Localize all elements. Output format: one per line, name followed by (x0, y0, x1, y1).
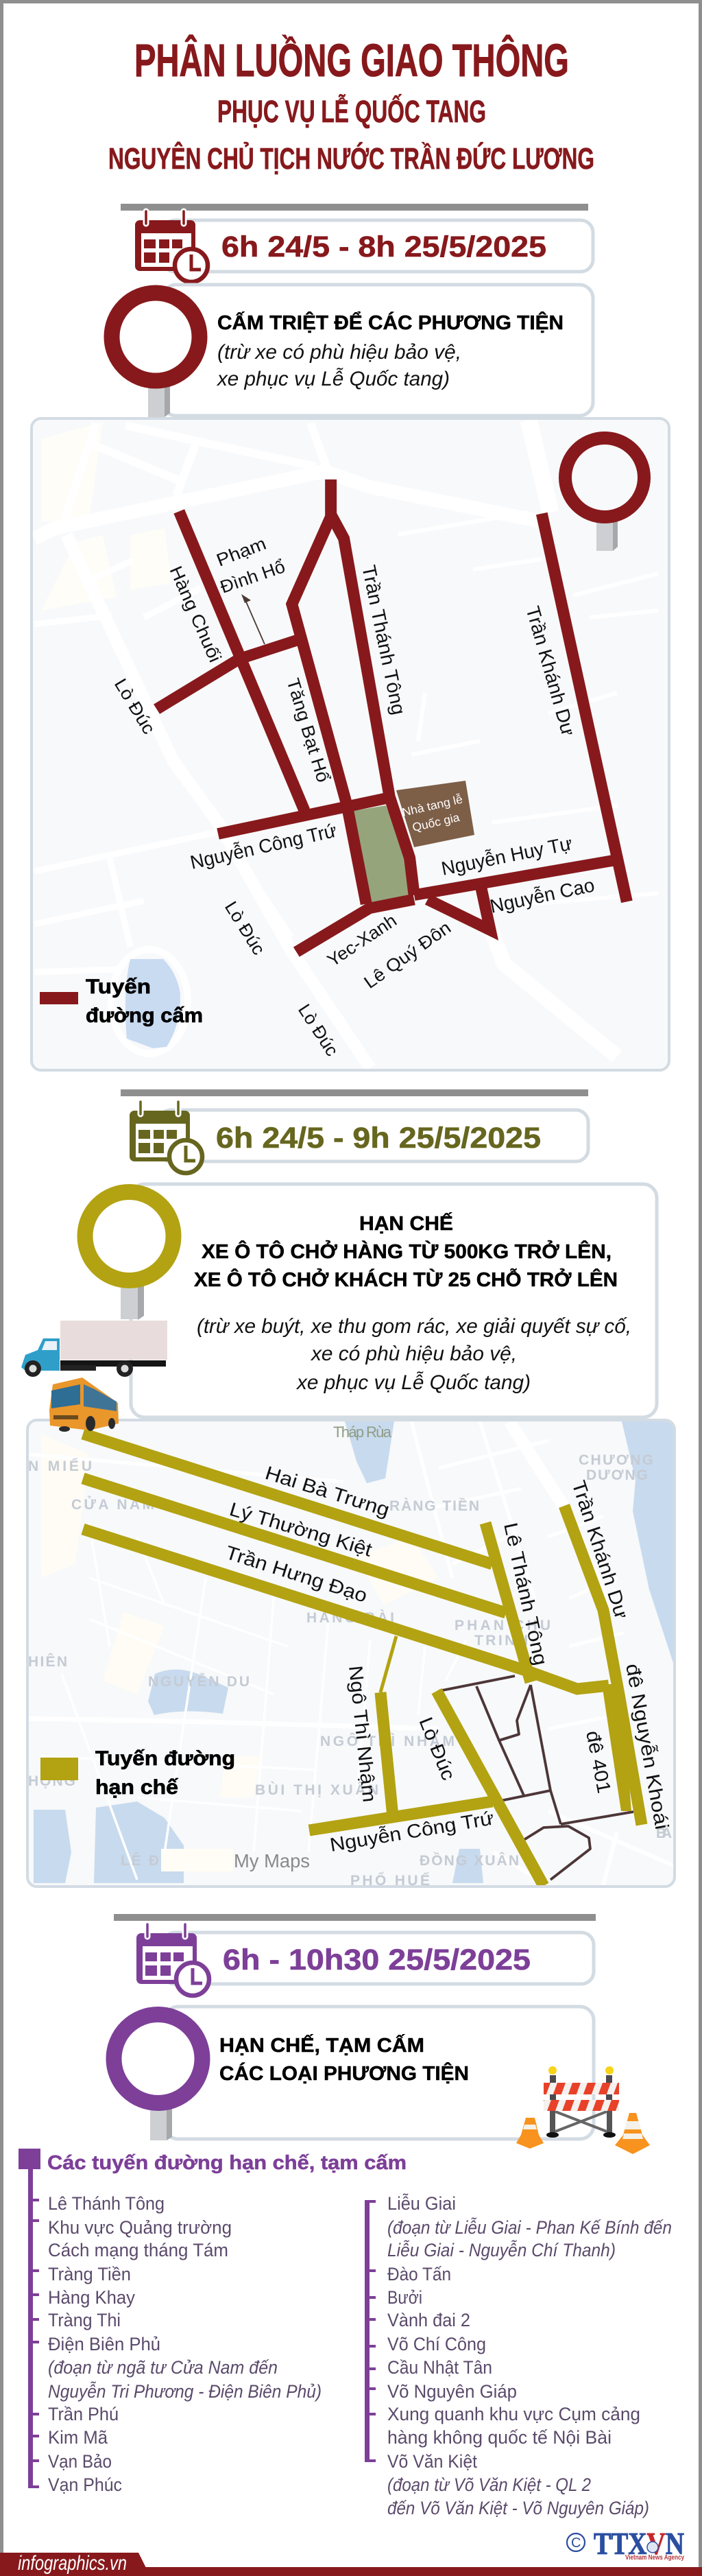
logo: TTXVN copyright: TTXVN (594, 2527, 684, 2561)
faded place names: NGUYỄN DU (148, 1674, 250, 1690)
panel: restricted vehicles box (131, 1184, 657, 1417)
street labels map 2: Trần Khánh Dư (568, 1478, 633, 1622)
panel: restricted vehicles box: XE Ô TÔ CHỞ KHÁCH TỪ 25 CHỖ TRỞ LÊN (194, 1268, 618, 1291)
faded place names: My Maps (234, 1850, 310, 1871)
icon: calendar and clock olive (130, 1102, 202, 1173)
date box 3: 6h - 10h30 25/5/2025 (223, 1943, 531, 1976)
list: left column: Nguyễn Tri Phương - Điện Biên Phủ) (48, 2380, 322, 2402)
street labels map 2 (223, 1462, 673, 1856)
faded place names: DƯƠNG (586, 1467, 648, 1483)
panel: total ban box (162, 285, 593, 416)
icon: olive road sign (85, 1192, 173, 1320)
list: left column: Hàng Khay (48, 2287, 135, 2308)
street labels map 2: Nguyễn Công Trứ (328, 1807, 496, 1856)
list: left column: Tràng Thi (48, 2310, 121, 2330)
street labels map 1: Lò Đúc (110, 675, 160, 737)
faded place names: N MIẾU (28, 1458, 92, 1474)
faded place names: ĐỒNG XUÂN (420, 1852, 519, 1869)
list: right column: Bưởi (387, 2287, 422, 2308)
panel: total ban box: (trừ xe có phù hiệu bảo vệ, (217, 341, 461, 364)
national funeral hall (396, 781, 474, 847)
list: left column: Kim Mã (48, 2427, 108, 2448)
date box 2: 6h 24/5 - 9h 25/5/2025 (216, 1122, 541, 1155)
date box 1 (162, 220, 593, 272)
list: right column: Đào Tấn (387, 2264, 451, 2284)
faded place names: RÀNG TIỀN (389, 1498, 479, 1514)
faded place names: LÊ Đ (121, 1852, 159, 1869)
street labels map 1: Nguyễn Cao (488, 874, 596, 917)
list: left column: Lê Thánh Tông (48, 2193, 165, 2214)
street labels map 1: Lò Đúc (221, 897, 269, 958)
faded place names (28, 1423, 672, 1889)
street labels map 1: Phạm (213, 533, 269, 571)
icon: small red road sign (565, 438, 644, 551)
divider bar 2 (121, 1089, 588, 1096)
faded place names: BÀ (656, 1825, 672, 1841)
faded place names: HÀNG BÀI (306, 1610, 394, 1626)
list: right column: Võ Văn Kiệt (387, 2451, 477, 2472)
list: right column: Võ Nguyên Giáp (387, 2381, 517, 2402)
icon: bus (49, 1378, 119, 1432)
legend: restricted route: Tuyến đường (95, 1747, 235, 1770)
legend: banned route: đường cấm (86, 1004, 203, 1027)
list: right column: (đoạn từ Võ Văn Kiệt - QL 2 (387, 2474, 591, 2495)
divider bar 3 (114, 1914, 596, 1921)
icon: purple road sign (114, 2014, 202, 2140)
list: left column: Tràng Tiền (48, 2264, 131, 2284)
legend: banned route: Tuyến (86, 976, 151, 998)
street labels map 2: Trần Hưng Đạo (223, 1541, 370, 1607)
panel: restricted vehicles box: (trừ xe buýt, xe thu gom rác, xe giải quyết sự cố, (197, 1315, 631, 1338)
date box 2 (158, 1110, 588, 1161)
legend: restricted route: hạn chế (95, 1776, 178, 1799)
street labels map 2: Hai Bà Trưng (263, 1462, 392, 1521)
street labels map 1: Lê Quý Đôn (360, 917, 455, 993)
lake (125, 959, 180, 1048)
faded place names: HIÊN (28, 1653, 67, 1670)
panel: total ban box: xe phục vụ Lễ Quốc tang) (216, 368, 450, 390)
divider bar 1 (121, 204, 588, 211)
list: right column: (đoạn từ Liễu Giai - Phan Kế Bính đến (387, 2217, 672, 2238)
footer band with website (0, 2552, 702, 2576)
street labels map 2: đê Nguyễn Khoái (622, 1662, 673, 1831)
icon: red road sign (112, 293, 199, 417)
panel: restricted vehicles box: XE Ô TÔ CHỞ HÀNG TỪ 500KG TRỞ LÊN, (202, 1240, 612, 1263)
street labels map 1: Lò Đúc (294, 1000, 343, 1060)
street labels map 2: Lý Thường Kiệt (227, 1498, 374, 1561)
panel: restrict and temporary ban box (165, 2007, 594, 2139)
street labels map 1: Hàng Chuối (166, 563, 226, 665)
memorial park block (349, 805, 409, 902)
logo: TTXVN copyright: Vietnam News Agency (625, 2554, 684, 2562)
list: left column (28, 2168, 322, 2495)
list: right column: hàng không quốc tế Nội Bài (387, 2427, 612, 2448)
list: right column: Vành đai 2 (387, 2310, 470, 2330)
faded place names: NGÔ THÌ NHẬM (320, 1733, 455, 1749)
list: left column: Điện Biên Phủ (48, 2334, 160, 2354)
national funeral hall: Nhà tang lễ (401, 792, 464, 819)
list: right column: Liễu Giai - Nguyễn Chí Thanh) (387, 2239, 616, 2260)
list: left column: Khu vực Quảng trường (48, 2217, 232, 2238)
street labels map 1: Trần Thánh Tông (358, 563, 409, 717)
street labels map 1: Đình Hổ (217, 556, 288, 598)
logo: TTXVN copyright: C (571, 2536, 581, 2551)
side street network (439, 1676, 633, 1880)
panel: map of banned streets (32, 418, 669, 1070)
street labels map 1: Nguyễn Công Trứ (189, 820, 339, 873)
faded place names: HỘNG (28, 1773, 75, 1789)
banned routes (157, 480, 627, 952)
arrow: Phạm Đình Hổ (241, 594, 265, 644)
faded place names: PHAN CHU (455, 1618, 550, 1633)
list: left column: Vạn Bảo (48, 2451, 112, 2472)
title: PHỤC VỤ LỄ QUỐC TANG (217, 94, 486, 129)
faded place names: TRINH (474, 1633, 528, 1649)
list: right column: Võ Chí Công (387, 2334, 486, 2354)
panel: map of restricted streets (27, 1420, 675, 1889)
icon: calendar and clock purple (136, 1924, 209, 1996)
faded place names: CHƯƠNG (579, 1452, 653, 1468)
street labels map 1: Nguyễn Huy Tự (439, 832, 574, 879)
list: right column: Liễu Giai (387, 2193, 456, 2214)
legend: banned route (40, 976, 203, 1027)
list: left column: Vạn Phúc (48, 2474, 122, 2495)
list: left column: Cách mạng tháng Tám (48, 2240, 228, 2260)
faded place names: Tháp Rùa (333, 1423, 392, 1441)
street labels map 1: Yec-Xanh (324, 910, 400, 971)
street labels map 2: Lê Thánh Tông (500, 1521, 552, 1667)
national funeral hall: Quốc gia (411, 811, 461, 834)
date box 1: 6h 24/5 - 8h 25/5/2025 (221, 231, 546, 263)
date box 3 (162, 1933, 594, 1984)
panel: restricted vehicles box: xe có phù hiệu bảo vệ, (310, 1343, 517, 1365)
list: left column: (đoạn từ ngã tư Cửa Nam đến (48, 2357, 278, 2378)
water bodies (34, 1421, 675, 1883)
legend: restricted route (40, 1747, 235, 1799)
restricted routes (83, 1434, 642, 1886)
icon: truck (21, 1321, 167, 1377)
heading: restricted routes list: Các tuyến đường hạn chế, tạm cấm (47, 2152, 407, 2174)
street labels map 1 (110, 533, 596, 1060)
title (108, 35, 594, 176)
panel: restrict and temporary ban box: CÁC LOẠI PHƯƠNG TIỆN (219, 2061, 469, 2085)
panel: restrict and temporary ban box: HẠN CHẾ, TẠM CẤM (219, 2033, 424, 2057)
panel: restricted vehicles box: HẠN CHẾ (359, 1212, 453, 1235)
footer band with website: infographics.vn (18, 2552, 127, 2575)
list: left column: Trần Phú (48, 2404, 119, 2424)
street labels map 2: đê 401 (582, 1729, 615, 1795)
panel: restricted vehicles box: xe phục vụ Lễ Quốc tang) (295, 1371, 531, 1394)
list: right column: Xung quanh khu vực Cụm cảng (387, 2404, 640, 2424)
list: right column (365, 2193, 672, 2518)
street labels map 1: Tăng Bạt Hổ (282, 676, 334, 785)
faded place names: CỬA NAM (71, 1496, 154, 1513)
list: right column: đến Võ Văn Kiệt - Võ Nguyên Giáp) (387, 2498, 649, 2518)
street labels map 2: Ngô Thì Nhậm (345, 1664, 380, 1804)
icon: road barrier and cones (516, 2066, 650, 2154)
icon: calendar and clock red (135, 211, 208, 282)
faded place names: BÙI THỊ XUÂN (255, 1782, 378, 1798)
street labels map 1: Trần Khánh Dư (522, 604, 579, 738)
list: right column: Cầu Nhật Tân (387, 2357, 492, 2378)
panel: total ban box: CẤM TRIỆT ĐỂ CÁC PHƯƠNG TIỆN (217, 311, 564, 334)
faded place names: PHỐ HUẾ (350, 1872, 430, 1889)
street labels map 2: Lò Đúc (415, 1714, 459, 1783)
